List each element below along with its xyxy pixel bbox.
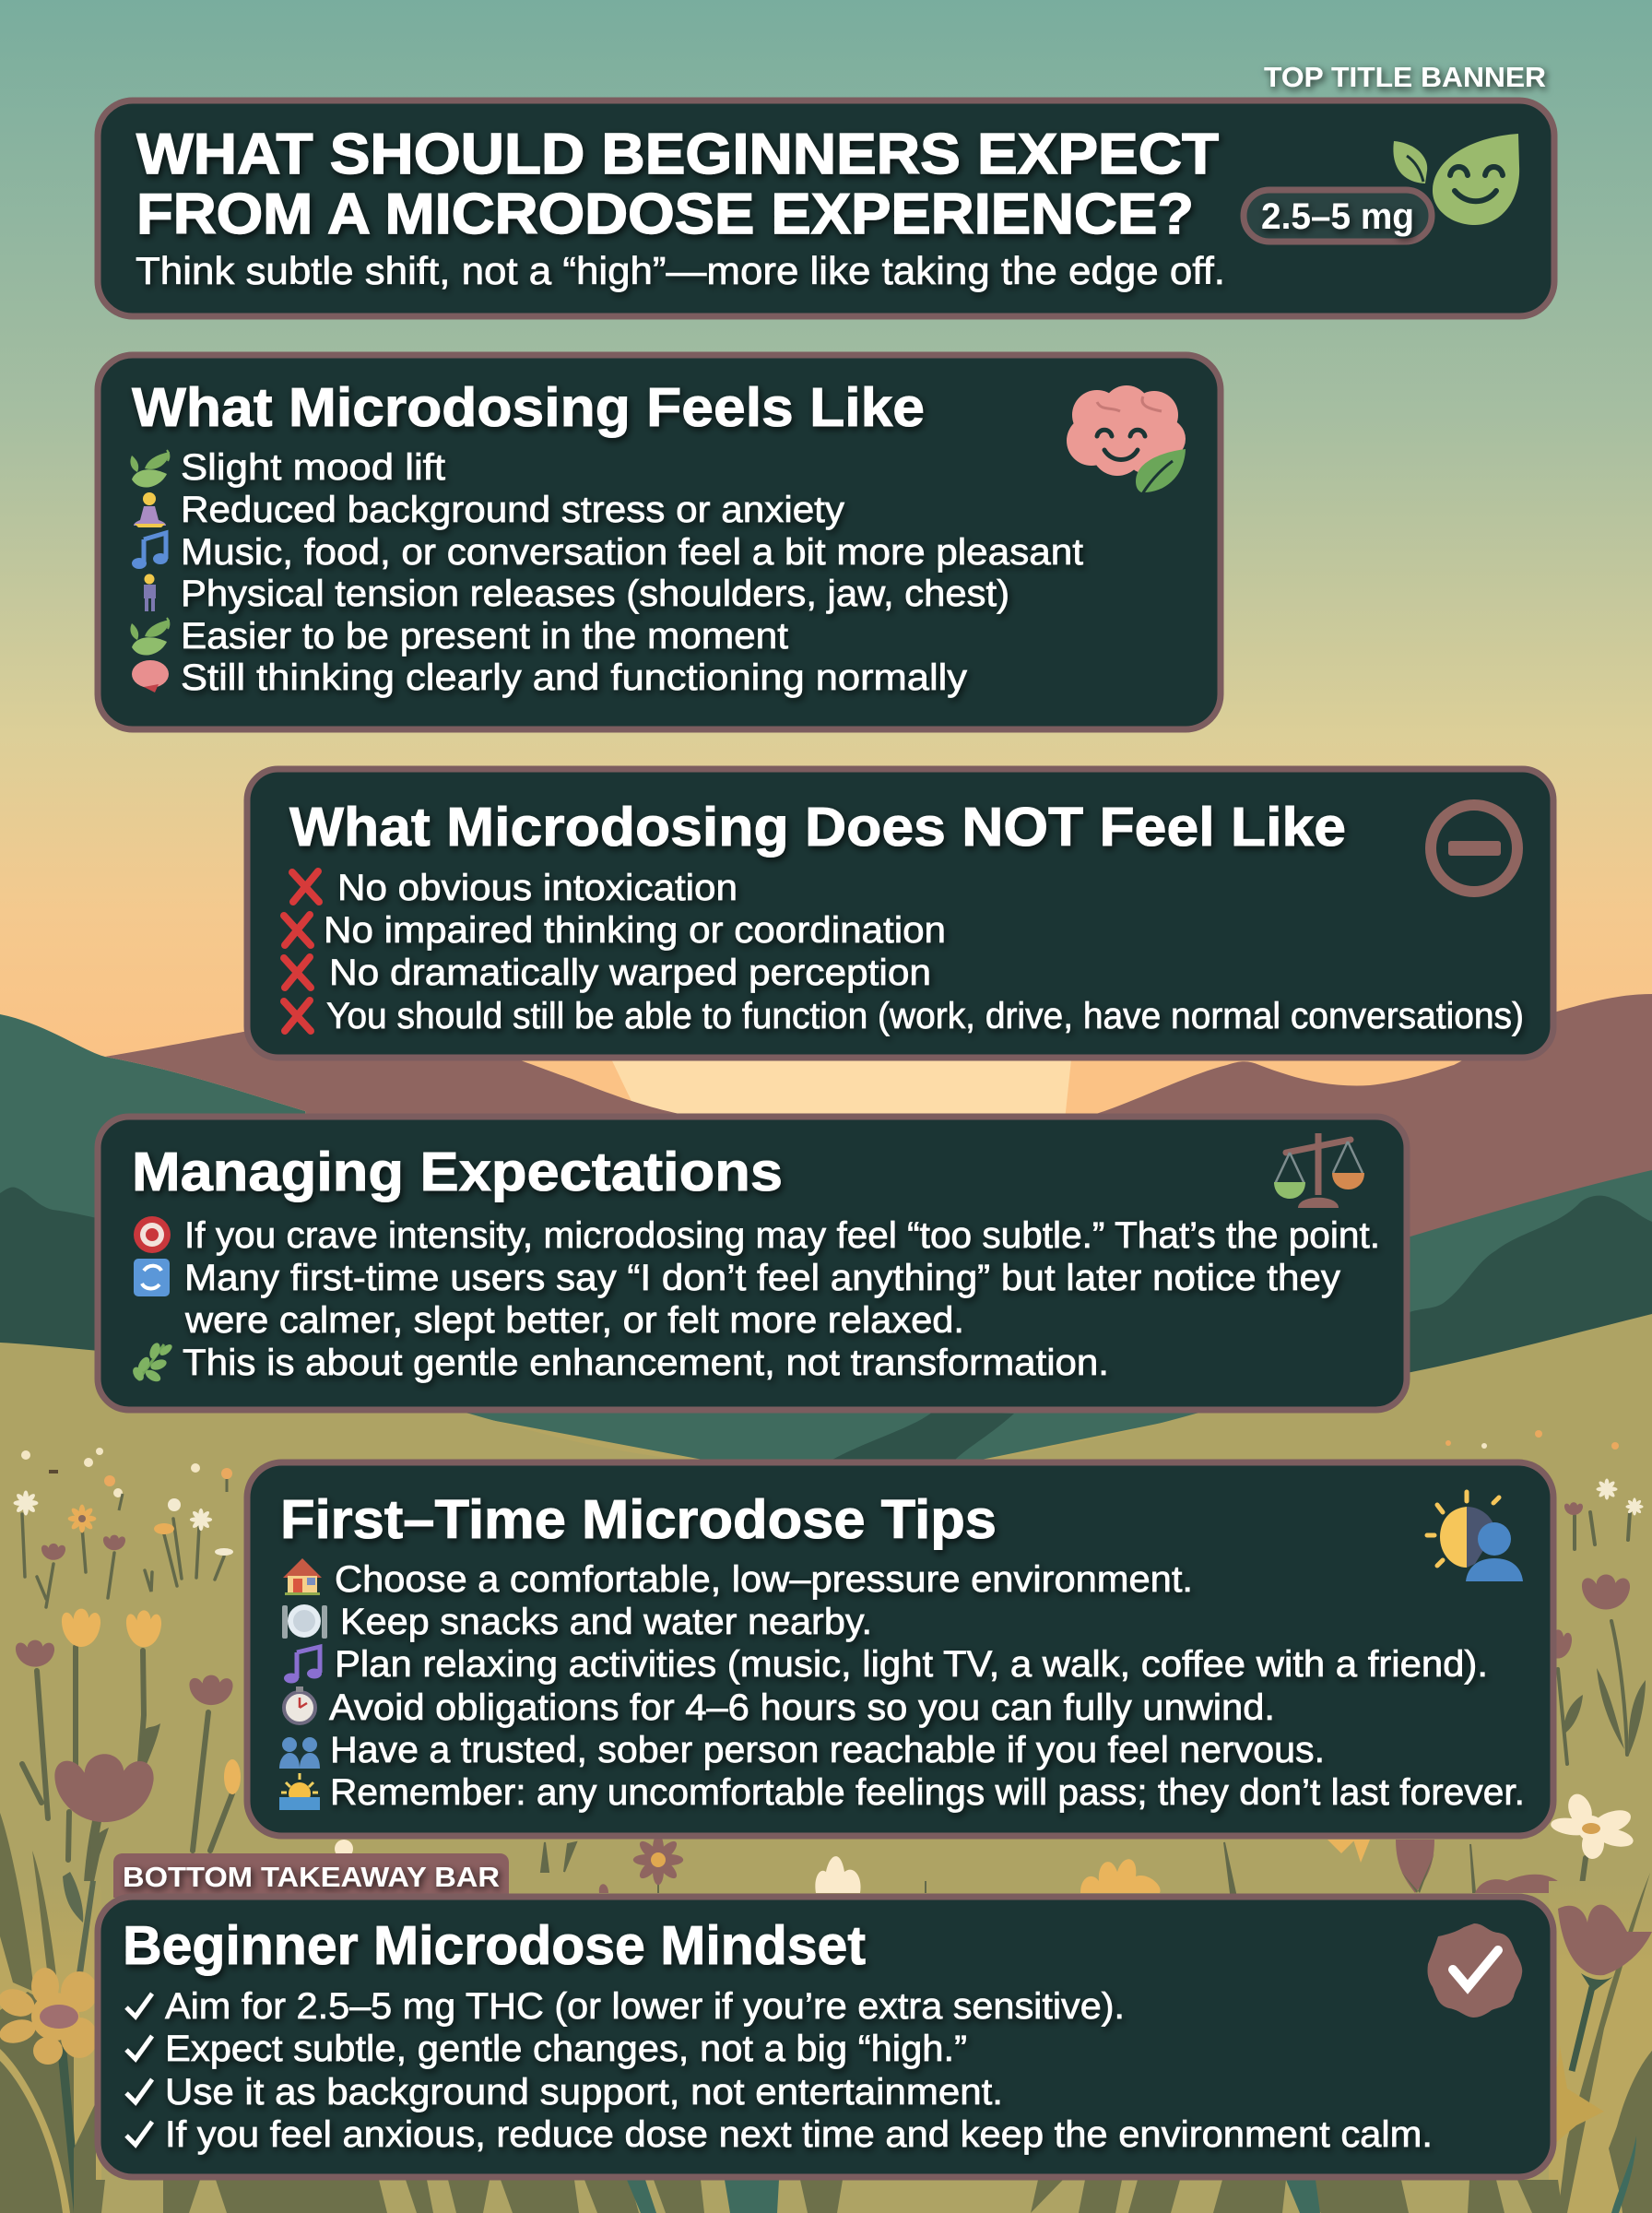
list: This is about gentle enhancement, not transformation. (183, 1343, 1109, 1383)
list (181, 447, 1083, 698)
panel: title banner (98, 101, 1554, 316)
icon: balance scales (1274, 1133, 1364, 1208)
heading: What Microdosing Does NOT Feel Like (289, 797, 1346, 858)
bullet icons (130, 450, 170, 692)
heading: What Microdosing Feels Like (132, 377, 925, 438)
bullet icons (131, 1216, 174, 1384)
heading: First–Time Microdose Tips (280, 1489, 997, 1550)
icon: smiling leaves (1393, 134, 1519, 225)
panel: managing expectations (98, 1117, 1407, 1410)
title heading (136, 123, 1219, 246)
checklist: Use it as background support, not entertainment. (165, 2072, 1003, 2112)
sky gradient (0, 0, 1652, 1383)
list: Avoid obligations for 4–6 hours so you can fully unwind. (329, 1687, 1275, 1728)
list: Slight mood lift (181, 447, 445, 488)
meadow (0, 1314, 1652, 2213)
tag: bottom takeaway bar: BOTTOM TAKEAWAY BAR (123, 1861, 500, 1893)
panel: what microdosing feels like (98, 355, 1221, 729)
list: Physical tension releases (shoulders, jaw, chest) (181, 574, 1009, 614)
sun ray (608, 1051, 1072, 1120)
list: Have a trusted, sober person reachable if you feel nervous. (330, 1730, 1325, 1770)
dose pill: 2.5–5 mg (1261, 196, 1414, 237)
title heading: FROM A MICRODOSE EXPERIENCE? (136, 183, 1194, 246)
bottom grass strip (0, 2158, 1563, 2213)
title heading: WHAT SHOULD BEGINNERS EXPECT (136, 123, 1219, 186)
list (324, 868, 1524, 1036)
label: top title banner: TOP TITLE BANNER (1264, 61, 1546, 93)
icon: check badge (1428, 1923, 1522, 2018)
foreground grass right (1549, 1873, 1652, 2213)
list: Reduced background stress or anxiety (181, 490, 844, 530)
list: Remember: any uncomfortable feelings will pass; they don’t last forever. (330, 1772, 1525, 1813)
list: Keep snacks and water nearby. (340, 1602, 872, 1642)
icon: sun and person (1427, 1492, 1523, 1581)
list: No dramatically warped perception (329, 953, 931, 993)
foreground grass left (0, 1813, 101, 2213)
list: Music, food, or conversation feel a bit more pleasant (181, 532, 1083, 573)
list: Still thinking clearly and functioning normally (181, 657, 967, 698)
tiny field flowers (21, 1430, 1619, 1510)
bullet icons (279, 1558, 327, 1810)
list: Plan relaxing activities (music, light TV, a walk, coffee with a friend). (335, 1644, 1488, 1685)
checklist: If you feel anxious, reduce dose next time and keep the environment calm. (165, 2114, 1433, 2155)
heading: Managing Expectations (132, 1142, 783, 1202)
panel: first-time microdose tips (247, 1462, 1553, 1836)
list: If you crave intensity, microdosing may feel “too subtle.” That’s the point. (184, 1215, 1380, 1256)
heading: Beginner Microdose Mindset (123, 1915, 866, 1976)
icon: happy brain (1067, 385, 1186, 499)
checklist (126, 1986, 1433, 2155)
midfield flowers between panels (335, 1835, 1567, 1893)
panel: beginner microdose mindset (98, 1897, 1553, 2177)
back hills (0, 994, 1652, 1466)
cross bullets (284, 871, 319, 1031)
dose pill (1244, 190, 1432, 242)
right wildflowers (1544, 1478, 1646, 2046)
list: No impaired thinking or coordination (324, 910, 946, 951)
subtitle: Think subtle shift, not a “high”—more like taking the edge off. (136, 249, 1225, 292)
left wildflowers (14, 1491, 241, 1899)
list (183, 1215, 1380, 1383)
list: were calmer, slept better, or felt more relaxed. (184, 1300, 964, 1341)
list: Many first-time users say “I don’t feel anything” but later notice they (184, 1258, 1340, 1298)
list: Choose a comfortable, low–pressure environment. (335, 1559, 1193, 1600)
list: No obvious intoxication (337, 868, 738, 908)
list: You should still be able to function (work, drive, have normal conversations) (326, 996, 1524, 1036)
tag: bottom takeaway bar (113, 1853, 509, 1898)
list: Easier to be present in the moment (181, 616, 788, 657)
list (329, 1559, 1525, 1813)
icon: no entry ring (1431, 805, 1517, 892)
panel: what microdosing does not feel like (247, 769, 1553, 1058)
checklist: Aim for 2.5–5 mg THC (or lower if you’re extra sensitive). (165, 1986, 1125, 2027)
checklist: Expect subtle, gentle changes, not a big “high.” (165, 2029, 967, 2069)
